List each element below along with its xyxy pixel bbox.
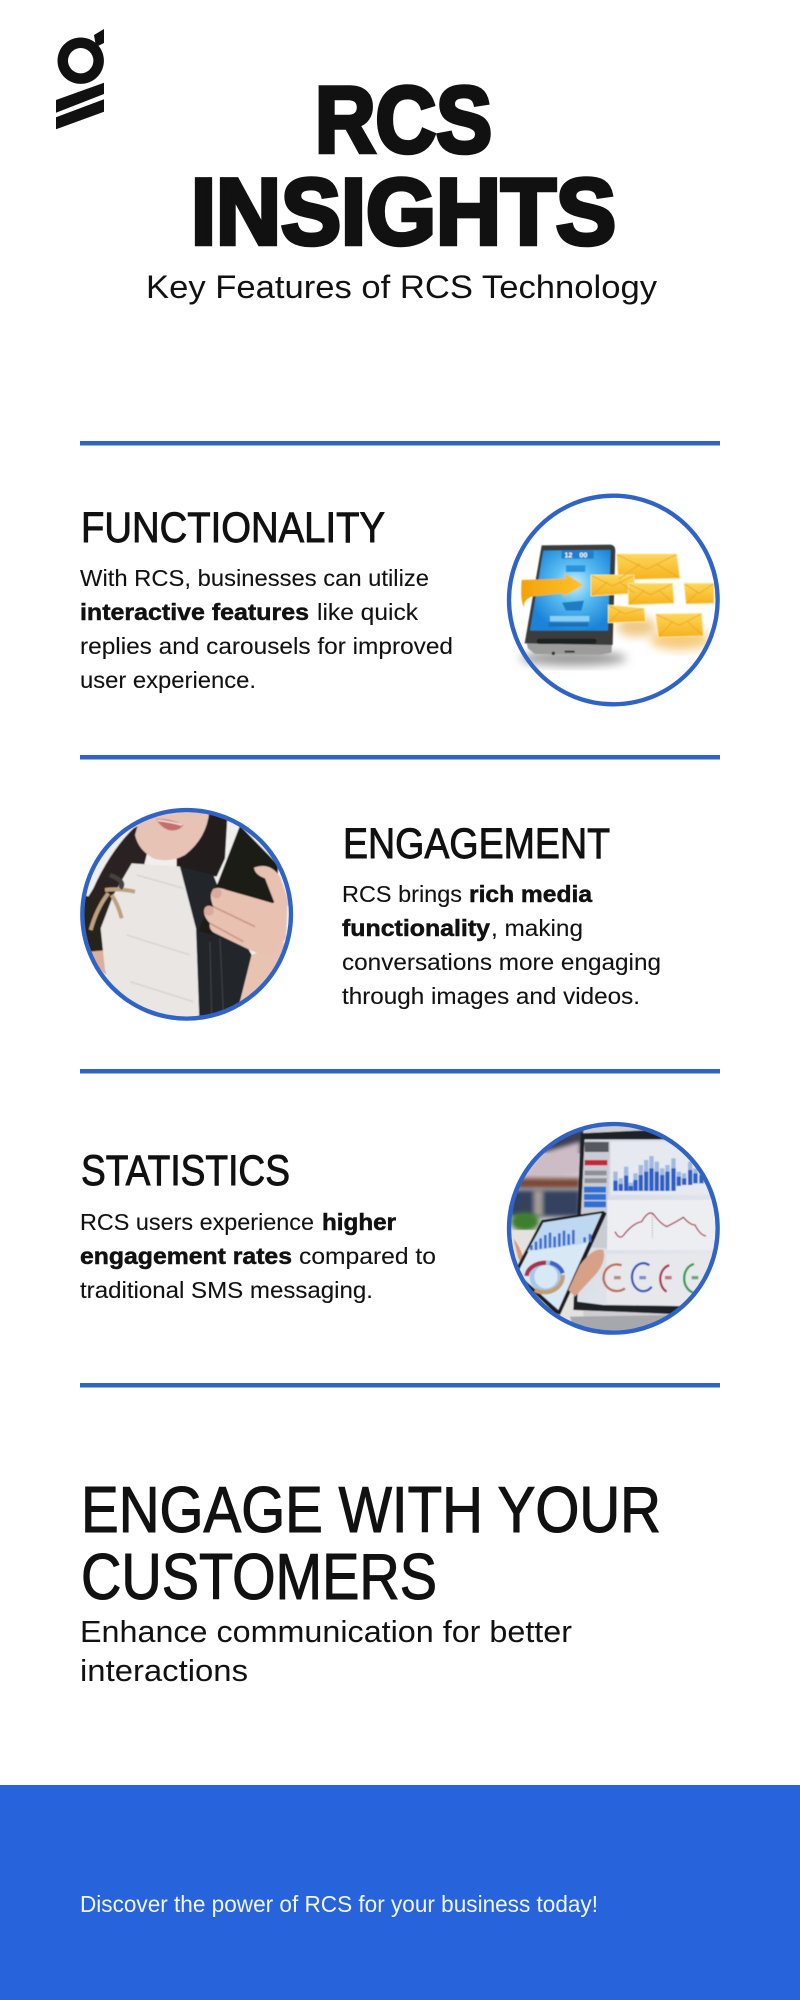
subtitle: Key Features of RCS Technology <box>146 269 658 305</box>
heading: statistics: STATISTICS <box>81 1147 290 1195</box>
heading: call to action: CUSTOMERS <box>81 1540 437 1613</box>
heading: call to action: ENGAGE WITH YOUR <box>81 1473 661 1546</box>
text block: engagement: RCS brings <box>342 881 462 907</box>
text block: functionality: With RCS, businesses can utilize <box>80 565 429 591</box>
text block: engagement: rich media <box>469 881 592 907</box>
text block: engagement: conversations more engaging <box>342 949 661 975</box>
text block: engagement: through images and videos. <box>342 983 640 1009</box>
text block: functionality: replies and carousels for improved <box>80 633 453 659</box>
panel: engagement <box>77 805 661 1025</box>
footer text: Discover the power of RCS for your business today! <box>80 1891 598 1917</box>
text block: statistics: traditional SMS messaging. <box>80 1277 373 1303</box>
footer band <box>0 1785 800 2000</box>
icon: phone with envelopes: 12 <box>564 551 572 560</box>
title: RCS <box>315 67 492 172</box>
text block: engagement <box>342 881 661 1009</box>
divider <box>80 1069 720 1074</box>
icon: woman holding phone <box>77 805 297 1025</box>
title: INSIGHTS <box>191 159 616 264</box>
icon: phone with envelopes: 00 <box>579 551 587 560</box>
text block: statistics: engagement rates <box>80 1243 292 1269</box>
divider <box>80 1383 720 1388</box>
icon: phone with envelopes <box>509 495 718 705</box>
text block: statistics <box>80 1209 436 1303</box>
text block: call to action subtitle: Enhance communication for better <box>80 1614 572 1649</box>
panel: statistics <box>80 1120 723 1340</box>
heading: engagement: ENGAGEMENT <box>343 820 610 868</box>
title <box>191 67 616 264</box>
icon: analytics dashboard <box>503 1120 723 1340</box>
text block: statistics: compared to <box>299 1243 436 1269</box>
text block: statistics: RCS users experience <box>80 1209 314 1235</box>
heading: call to action <box>81 1473 661 1613</box>
text block: functionality <box>80 565 453 693</box>
panel: functionality <box>80 495 718 705</box>
divider <box>80 755 720 760</box>
text block: functionality: user experience. <box>80 667 256 693</box>
logo <box>56 29 104 129</box>
text block: functionality: interactive features <box>80 599 309 625</box>
text block: call to action subtitle: interactions <box>80 1653 248 1688</box>
divider <box>80 441 720 446</box>
text block: engagement: functionality <box>342 915 490 941</box>
text block: statistics: higher <box>322 1209 396 1235</box>
text block: functionality: like quick <box>317 599 418 625</box>
text block: engagement: , making <box>491 915 583 941</box>
heading: functionality: FUNCTIONALITY <box>81 504 385 552</box>
text block: call to action subtitle <box>80 1614 572 1688</box>
